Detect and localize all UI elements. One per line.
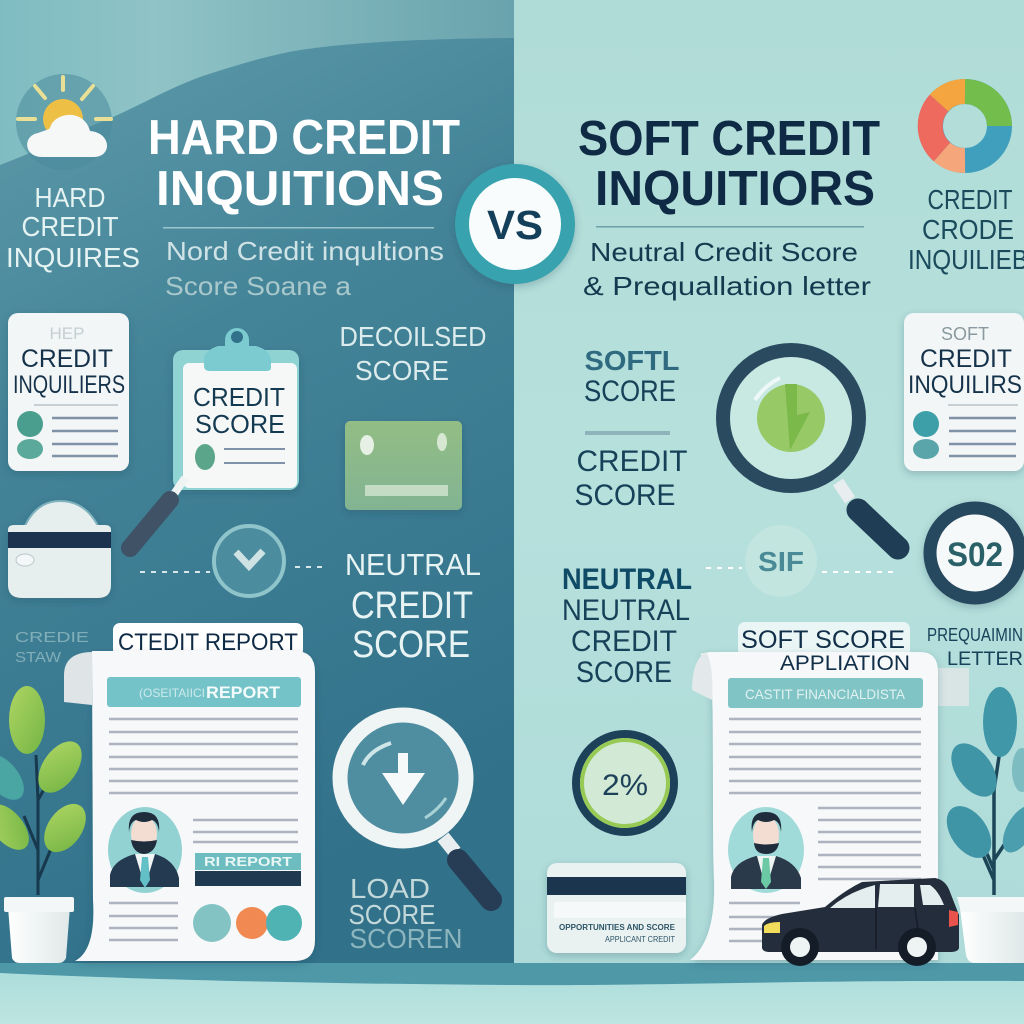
score badge S02 — [930, 508, 1020, 598]
text: soft score — [584, 345, 680, 408]
right application document — [690, 622, 969, 960]
clipboard with magnifier — [130, 328, 299, 548]
text: load score — [348, 873, 462, 954]
right application document: APPLIATION — [780, 652, 910, 675]
text: decoilsed score: SCORE — [355, 355, 449, 386]
divider under left title — [163, 227, 434, 228]
right plant — [938, 687, 1024, 963]
person portrait — [108, 807, 182, 893]
right magnifier with check — [723, 350, 898, 548]
text: prequalification letter: LETTER — [947, 649, 1023, 670]
left credit report document: CTEDIT REPORT — [118, 629, 298, 656]
percent gauge — [576, 734, 674, 832]
right application document: SOFT SCORE — [741, 626, 905, 654]
left card icon — [8, 501, 111, 598]
left magnifier — [340, 715, 491, 900]
text: load score: SCORE — [348, 899, 436, 930]
card: left credit inquiries: CREDIT — [21, 345, 113, 373]
score badge S02: S02 — [947, 536, 1003, 574]
background: left panel — [0, 0, 514, 964]
card: left credit inquiries — [8, 313, 129, 471]
smudged rule — [585, 431, 670, 435]
left subtitle: Score Soane a — [165, 271, 352, 301]
floor band — [0, 963, 1024, 1024]
left credit report document — [64, 623, 315, 961]
right side label: CRODE — [922, 214, 1014, 245]
text: neutral credit score right: NEUTRAL — [562, 594, 690, 627]
person portrait right — [728, 807, 804, 893]
sif badge — [745, 525, 817, 597]
VS badge — [455, 164, 575, 284]
left side label: INQUIRES — [6, 242, 140, 273]
title: soft credit: INQUITIORS — [595, 162, 875, 216]
text: soft score: SOFTL — [584, 345, 680, 376]
text: credit score right: SCORE — [574, 479, 676, 512]
card: left credit inquiries: INQUILIERS — [13, 371, 125, 399]
card: right soft credit inquiries: CREDIT — [920, 345, 1012, 373]
text: neutral credit score right: CREDIT — [571, 625, 677, 658]
title: soft credit: SOFT CREDIT — [578, 112, 880, 166]
left side label — [6, 182, 140, 273]
icon: donut chart — [930, 91, 1000, 161]
green card — [345, 421, 462, 510]
right pot — [957, 897, 1024, 963]
title: hard credit — [148, 111, 460, 216]
left credit report document: RI REPORT — [204, 854, 292, 869]
text: decoilsed score — [340, 321, 486, 386]
clipboard with magnifier: SCORE — [195, 409, 285, 439]
text: neutral credit score: NEUTRAL — [345, 547, 481, 582]
car — [762, 878, 959, 966]
text: neutral credit score: SCORE — [352, 624, 470, 666]
left subtitle: Nord Credit inqultions — [166, 236, 444, 266]
text: load score: SCOREN — [350, 923, 462, 954]
clipboard with magnifier: CREDIT — [193, 382, 285, 412]
left side label: HARD — [34, 182, 106, 213]
icon: sun and cloud — [16, 74, 112, 170]
text: credit score right: CREDIT — [576, 445, 688, 478]
text: neutral credit score right: SCORE — [576, 656, 672, 689]
text: neutral credit score right: NEUTRAL — [562, 563, 692, 596]
left subtitle — [165, 236, 444, 301]
text: neutral credit score: CREDIT — [351, 585, 473, 627]
text: neutral credit score right — [562, 563, 692, 689]
right application document: CASTIT FINANCIALDISTA — [745, 686, 906, 702]
faint label: STAW — [15, 649, 62, 666]
divider under right title — [596, 226, 864, 228]
card: right soft credit inquiries: SOFT — [941, 324, 989, 344]
left pot — [4, 897, 74, 963]
left dotted connector — [140, 567, 325, 572]
left side label: CREDIT — [22, 211, 118, 242]
right credit card: APPLICANT CREDIT — [605, 935, 675, 944]
text: neutral credit score — [345, 547, 481, 666]
title: soft credit — [578, 112, 880, 216]
title: hard credit: HARD CREDIT — [148, 111, 460, 165]
text: load score: LOAD — [350, 873, 430, 904]
title: hard credit: INQUITIONS — [156, 162, 444, 216]
percent gauge: 2% — [602, 769, 648, 802]
right subtitle — [583, 237, 871, 301]
check badge — [214, 526, 284, 596]
right credit card: OPPORTUNITIES AND SCORE — [559, 923, 676, 932]
card: left credit inquiries: HEP — [50, 324, 84, 343]
text: credit score right — [574, 445, 688, 512]
right subtitle: Neutral Credit Score — [590, 237, 858, 267]
left credit report document: (OSEITAIICI — [139, 686, 205, 700]
sif badge: SIF — [758, 546, 804, 577]
right subtitle: & Prequallation letter — [583, 271, 871, 301]
faint label: CREDIE — [15, 629, 89, 646]
faint label — [15, 629, 89, 666]
background: right panel — [514, 0, 1024, 964]
right side label — [908, 184, 1024, 275]
left plant — [0, 686, 94, 963]
left credit report document: REPORT — [206, 683, 281, 702]
card: right soft credit inquiries — [904, 313, 1024, 471]
text: prequalification letter — [927, 625, 1023, 670]
text: soft score: SCORE — [584, 375, 676, 408]
text: decoilsed score: DECOILSED — [340, 321, 486, 352]
VS badge: VS — [487, 202, 543, 248]
right credit card — [547, 863, 686, 953]
right dotted connector — [706, 568, 896, 572]
